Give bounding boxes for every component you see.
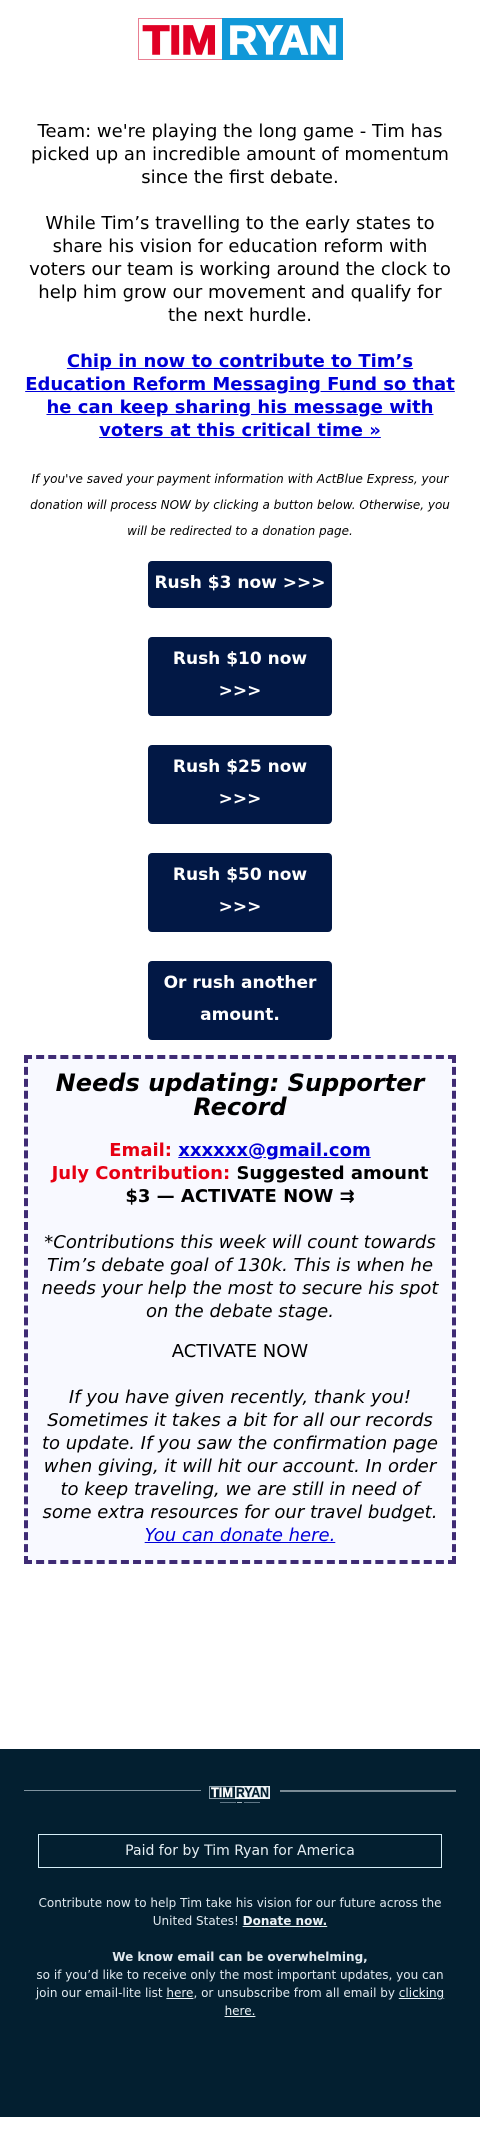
- email preferences text: We know email can be overwhelming,: [112, 1950, 368, 1964]
- email and contribution lines: July Contribution: Suggested amount: [52, 1163, 428, 1184]
- email and contribution lines: [50, 1140, 428, 1207]
- paid for by: [38, 1834, 442, 1868]
- intro text: While Tim’s travelling to the early states to: [45, 213, 435, 234]
- button: rush $10: Rush $10 now: [173, 649, 307, 669]
- button: rush $50: Rush $50 now: [173, 865, 307, 885]
- call to action link: he can keep sharing his message with: [46, 397, 434, 418]
- debate goal text: needs your help the most to secure his spot: [41, 1278, 438, 1299]
- panel: supporter record: [24, 1055, 456, 1564]
- button: rush $3: Rush $3 now >>>: [154, 573, 326, 593]
- thank you text: some extra resources for our travel budget.: [43, 1502, 437, 1523]
- activate now: ACTIVATE NOW: [172, 1341, 308, 1362]
- panel heading: Needs updating: Supporter: [56, 1069, 424, 1097]
- intro text: share his vision for education reform with: [53, 236, 427, 257]
- call to action link: voters at this critical time »: [99, 420, 381, 441]
- button: rush $10: >>>: [219, 681, 261, 701]
- debate goal text: Tim’s debate goal of 130k. This is when he: [47, 1255, 433, 1276]
- button: rush $50: [148, 853, 332, 932]
- intro text: since the first debate.: [141, 167, 339, 188]
- ActBlue Express note: [30, 472, 450, 538]
- intro text: help him grow our movement and qualify for: [38, 282, 442, 303]
- thank you text: Sometimes it takes a bit for all our records: [47, 1410, 433, 1431]
- email and contribution lines: $3 — ACTIVATE NOW ⇉: [125, 1186, 355, 1207]
- button: rush $25: >>>: [219, 789, 261, 809]
- button: rush $3: [148, 561, 332, 608]
- email preferences text: join our email-lite list here, or unsubscribe from all email by clicking: [36, 1986, 444, 2000]
- footer divider and logo: RYAN: [236, 1784, 269, 1800]
- email and contribution lines: Email: xxxxxx@gmail.com: [109, 1140, 371, 1161]
- call to action link: Chip in now to contribute to Tim’s: [67, 351, 413, 372]
- ActBlue Express note: If you've saved your payment information with ActBlue Express, your: [32, 472, 448, 486]
- thank you text: when giving, it will hit our account. In order: [44, 1456, 436, 1477]
- button: other amount: Or rush another: [164, 973, 316, 993]
- button: other amount: [148, 961, 332, 1040]
- intro text: the next hurdle.: [168, 305, 312, 326]
- thank you text: to keep traveling, we are still in need of: [60, 1479, 420, 1500]
- logo: Tim Ryan: [138, 18, 343, 60]
- intro text: voters our team is working around the clock to: [29, 259, 451, 280]
- contribute text: Contribute now to help Tim take his vision for our future across the: [38, 1896, 441, 1910]
- debate goal text: *Contributions this week will count towards: [44, 1232, 436, 1253]
- ActBlue Express note: will be redirected to a donation page.: [127, 524, 353, 538]
- email preferences text: [36, 1950, 444, 2018]
- thank you text: [42, 1387, 438, 1546]
- debate goal text: on the debate stage.: [146, 1301, 334, 1322]
- footer: [0, 1749, 480, 2117]
- intro text: picked up an incredible amount of momentum: [31, 144, 449, 165]
- email preferences text: here.: [225, 2004, 255, 2018]
- footer divider and logo: [24, 1784, 456, 1803]
- panel heading: Record: [193, 1093, 287, 1121]
- intro text: [29, 121, 451, 326]
- button: other amount: amount.: [200, 1005, 280, 1025]
- thank you text: You can donate here.: [145, 1525, 335, 1546]
- thank you text: If you have given recently, thank you!: [69, 1387, 411, 1408]
- email preferences text: so if you’d like to receive only the most important updates, you can: [36, 1968, 444, 1982]
- intro text: Team: we're playing the long game - Tim has: [38, 121, 442, 142]
- contribute text: [38, 1896, 441, 1928]
- button: rush $50: >>>: [219, 897, 261, 917]
- panel heading: [56, 1069, 426, 1121]
- button: rush $25: Rush $25 now: [173, 757, 307, 777]
- footer divider and logo: TIM: [211, 1784, 233, 1800]
- button: rush $10: [148, 637, 332, 716]
- button: rush $25: [148, 745, 332, 824]
- call to action link: [25, 351, 455, 441]
- paid for by: Paid for by Tim Ryan for America: [125, 1843, 355, 1859]
- contribute text: United States! Donate now.: [153, 1914, 327, 1928]
- debate goal text: [41, 1232, 439, 1322]
- call to action link: Education Reform Messaging Fund so that: [25, 374, 455, 395]
- ActBlue Express note: donation will process NOW by clicking a button below. Otherwise, you: [30, 498, 450, 512]
- thank you text: to update. If you saw the confirmation page: [42, 1433, 438, 1454]
